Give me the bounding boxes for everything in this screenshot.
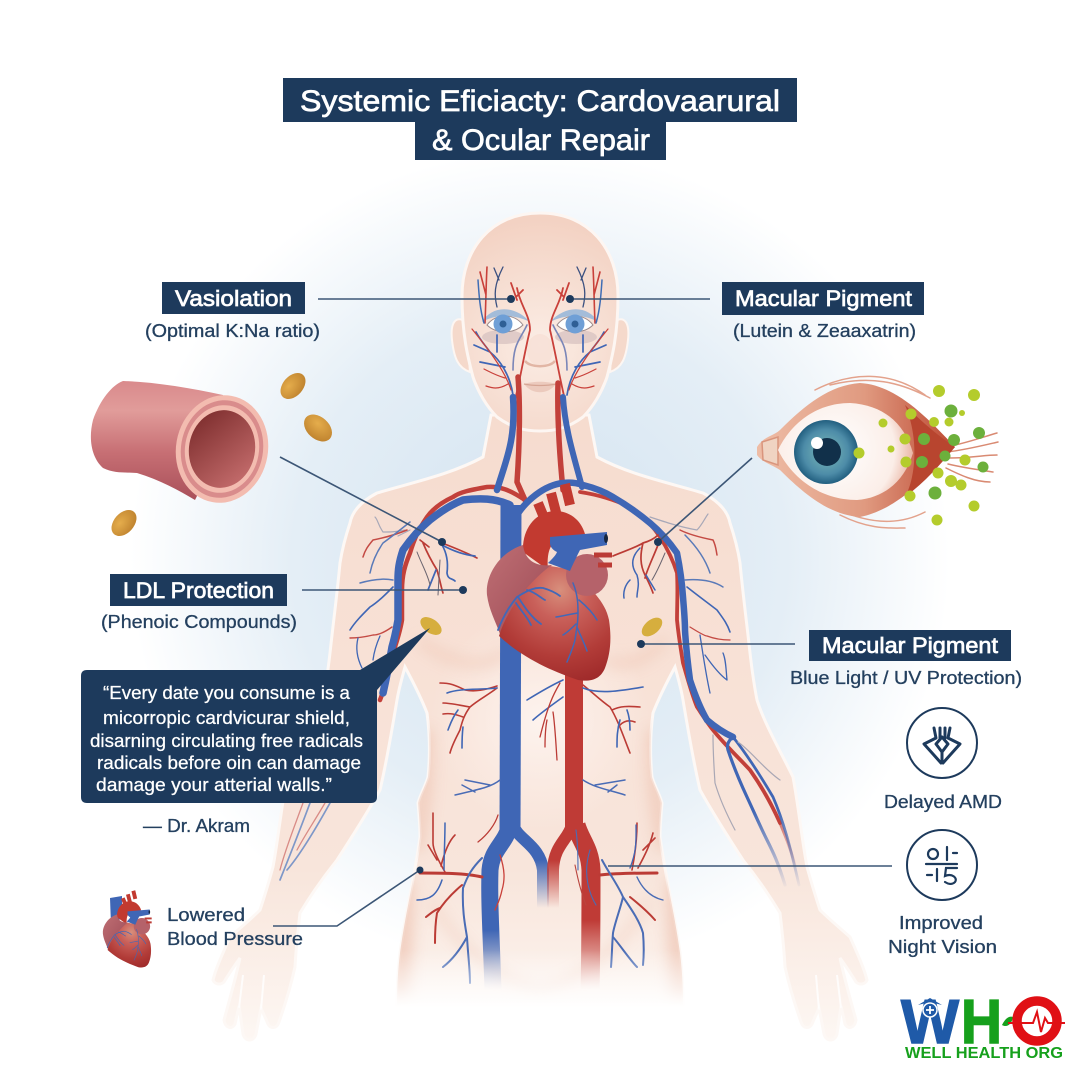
left eye <box>487 316 523 332</box>
title: Systemic Eficiacty: Cardovaarural <box>300 85 780 118</box>
label: Vasiolation <box>145 282 320 341</box>
label: LDL Protection: (Phenoic Compounds) <box>101 612 297 632</box>
quote callout: damage your atterial walls.” <box>96 775 332 795</box>
vena cava left limb <box>490 825 510 990</box>
right abdomen <box>583 685 640 753</box>
right neck vein <box>563 397 582 487</box>
logo: Well Health Org: W <box>901 988 959 1057</box>
dark rear <box>905 405 955 497</box>
logo: Well Health Org: WELL HEALTH ORG <box>905 1045 1063 1062</box>
label: Lowered Blood Pressure: Lowered <box>167 905 245 925</box>
aorta right limb <box>576 825 591 992</box>
illustration: eye with pigment particles <box>757 376 998 528</box>
mouth <box>524 382 556 392</box>
leader lines <box>273 295 892 926</box>
right brachiocephalic vein <box>514 483 733 737</box>
label: Improved Night Vision: Night Vision <box>888 937 997 957</box>
left abdomen <box>440 683 497 753</box>
ears <box>452 319 628 372</box>
label: Macular Pigment lower: Macular Pigment <box>822 633 998 658</box>
upper abdomen small veins <box>455 780 500 795</box>
icons: dates <box>107 368 666 640</box>
body silhouette <box>213 415 867 1040</box>
vena cava <box>510 505 511 832</box>
quote callout: disarning circulating free radicals <box>90 731 363 751</box>
label: Delayed AMD: Delayed AMD <box>884 792 1002 812</box>
label: Improved Night Vision: Improved <box>899 913 983 933</box>
caruncle <box>762 437 778 465</box>
left chest tree <box>420 540 477 593</box>
right pelvis <box>600 873 657 875</box>
nose <box>527 334 553 366</box>
label: LDL Protection <box>101 574 297 632</box>
left pelvis <box>420 873 482 877</box>
quote callout: radicals before oin can damage <box>97 753 361 773</box>
right subclavian artery <box>580 492 780 823</box>
heart <box>487 484 612 681</box>
logo: Well Health Org <box>901 988 1065 1062</box>
right chest tree <box>613 535 658 593</box>
label: Macular Pigment top: Macular Pigment <box>735 286 912 311</box>
quote attribution: — Dr. Akram <box>143 816 250 836</box>
aorta left limb <box>553 825 572 910</box>
label: Macular Pigment top <box>722 282 924 341</box>
label: Vasiolation: Vasiolation <box>175 286 292 311</box>
title: & Ocular Repair <box>432 124 650 157</box>
label: Lowered Blood Pressure: Blood Pressure <box>167 929 303 949</box>
vena cava right limb <box>513 825 543 910</box>
branching vessels <box>280 514 730 983</box>
label: Lowered Blood Pressure <box>167 905 303 949</box>
logo: Well Health Org: H <box>961 988 1002 1057</box>
quote callout: “Every date you consume is a <box>103 683 351 703</box>
label: Macular Pigment top: (Lutein & Zeaaxatrin) <box>733 321 916 341</box>
body illustration <box>213 213 867 1040</box>
neck arteries <box>517 377 525 500</box>
right outer chest <box>650 514 708 530</box>
body shading <box>239 610 841 1010</box>
quote callout <box>81 628 430 803</box>
bottom fade <box>385 950 695 1010</box>
great vessels <box>380 377 799 992</box>
face features <box>482 309 598 392</box>
quote callout: micorropic cardvicurar shield, <box>103 708 350 728</box>
icon: heart small <box>103 891 152 967</box>
eyeball wall <box>757 383 955 517</box>
wisps <box>815 376 998 528</box>
head <box>462 213 618 431</box>
descending aorta <box>565 670 583 835</box>
label: Macular Pigment lower: Blue Light / UV Protection) <box>790 668 1022 688</box>
label: Improved Night Vision <box>888 913 997 957</box>
sclera <box>778 403 913 500</box>
label: Vasiolation: (Optimal K:Na ratio) <box>145 321 320 341</box>
icon: Improved Night Vision <box>907 830 977 900</box>
title <box>283 78 797 160</box>
right forearm veins <box>728 737 785 885</box>
label: LDL Protection: LDL Protection <box>123 578 274 603</box>
left forearm vessels <box>280 803 330 880</box>
illustration: artery cross-section <box>91 381 277 510</box>
left subclavian artery <box>380 487 525 700</box>
left outer chest <box>375 517 410 536</box>
right eye <box>557 316 593 332</box>
eye shadows <box>482 309 598 322</box>
icon: Delayed AMD <box>907 708 977 778</box>
face vessels <box>472 267 608 400</box>
left neck vein <box>497 397 514 490</box>
right forearm artery end <box>780 823 795 865</box>
left brachiocephalic vein <box>383 499 510 693</box>
label: Macular Pigment lower <box>790 630 1022 688</box>
